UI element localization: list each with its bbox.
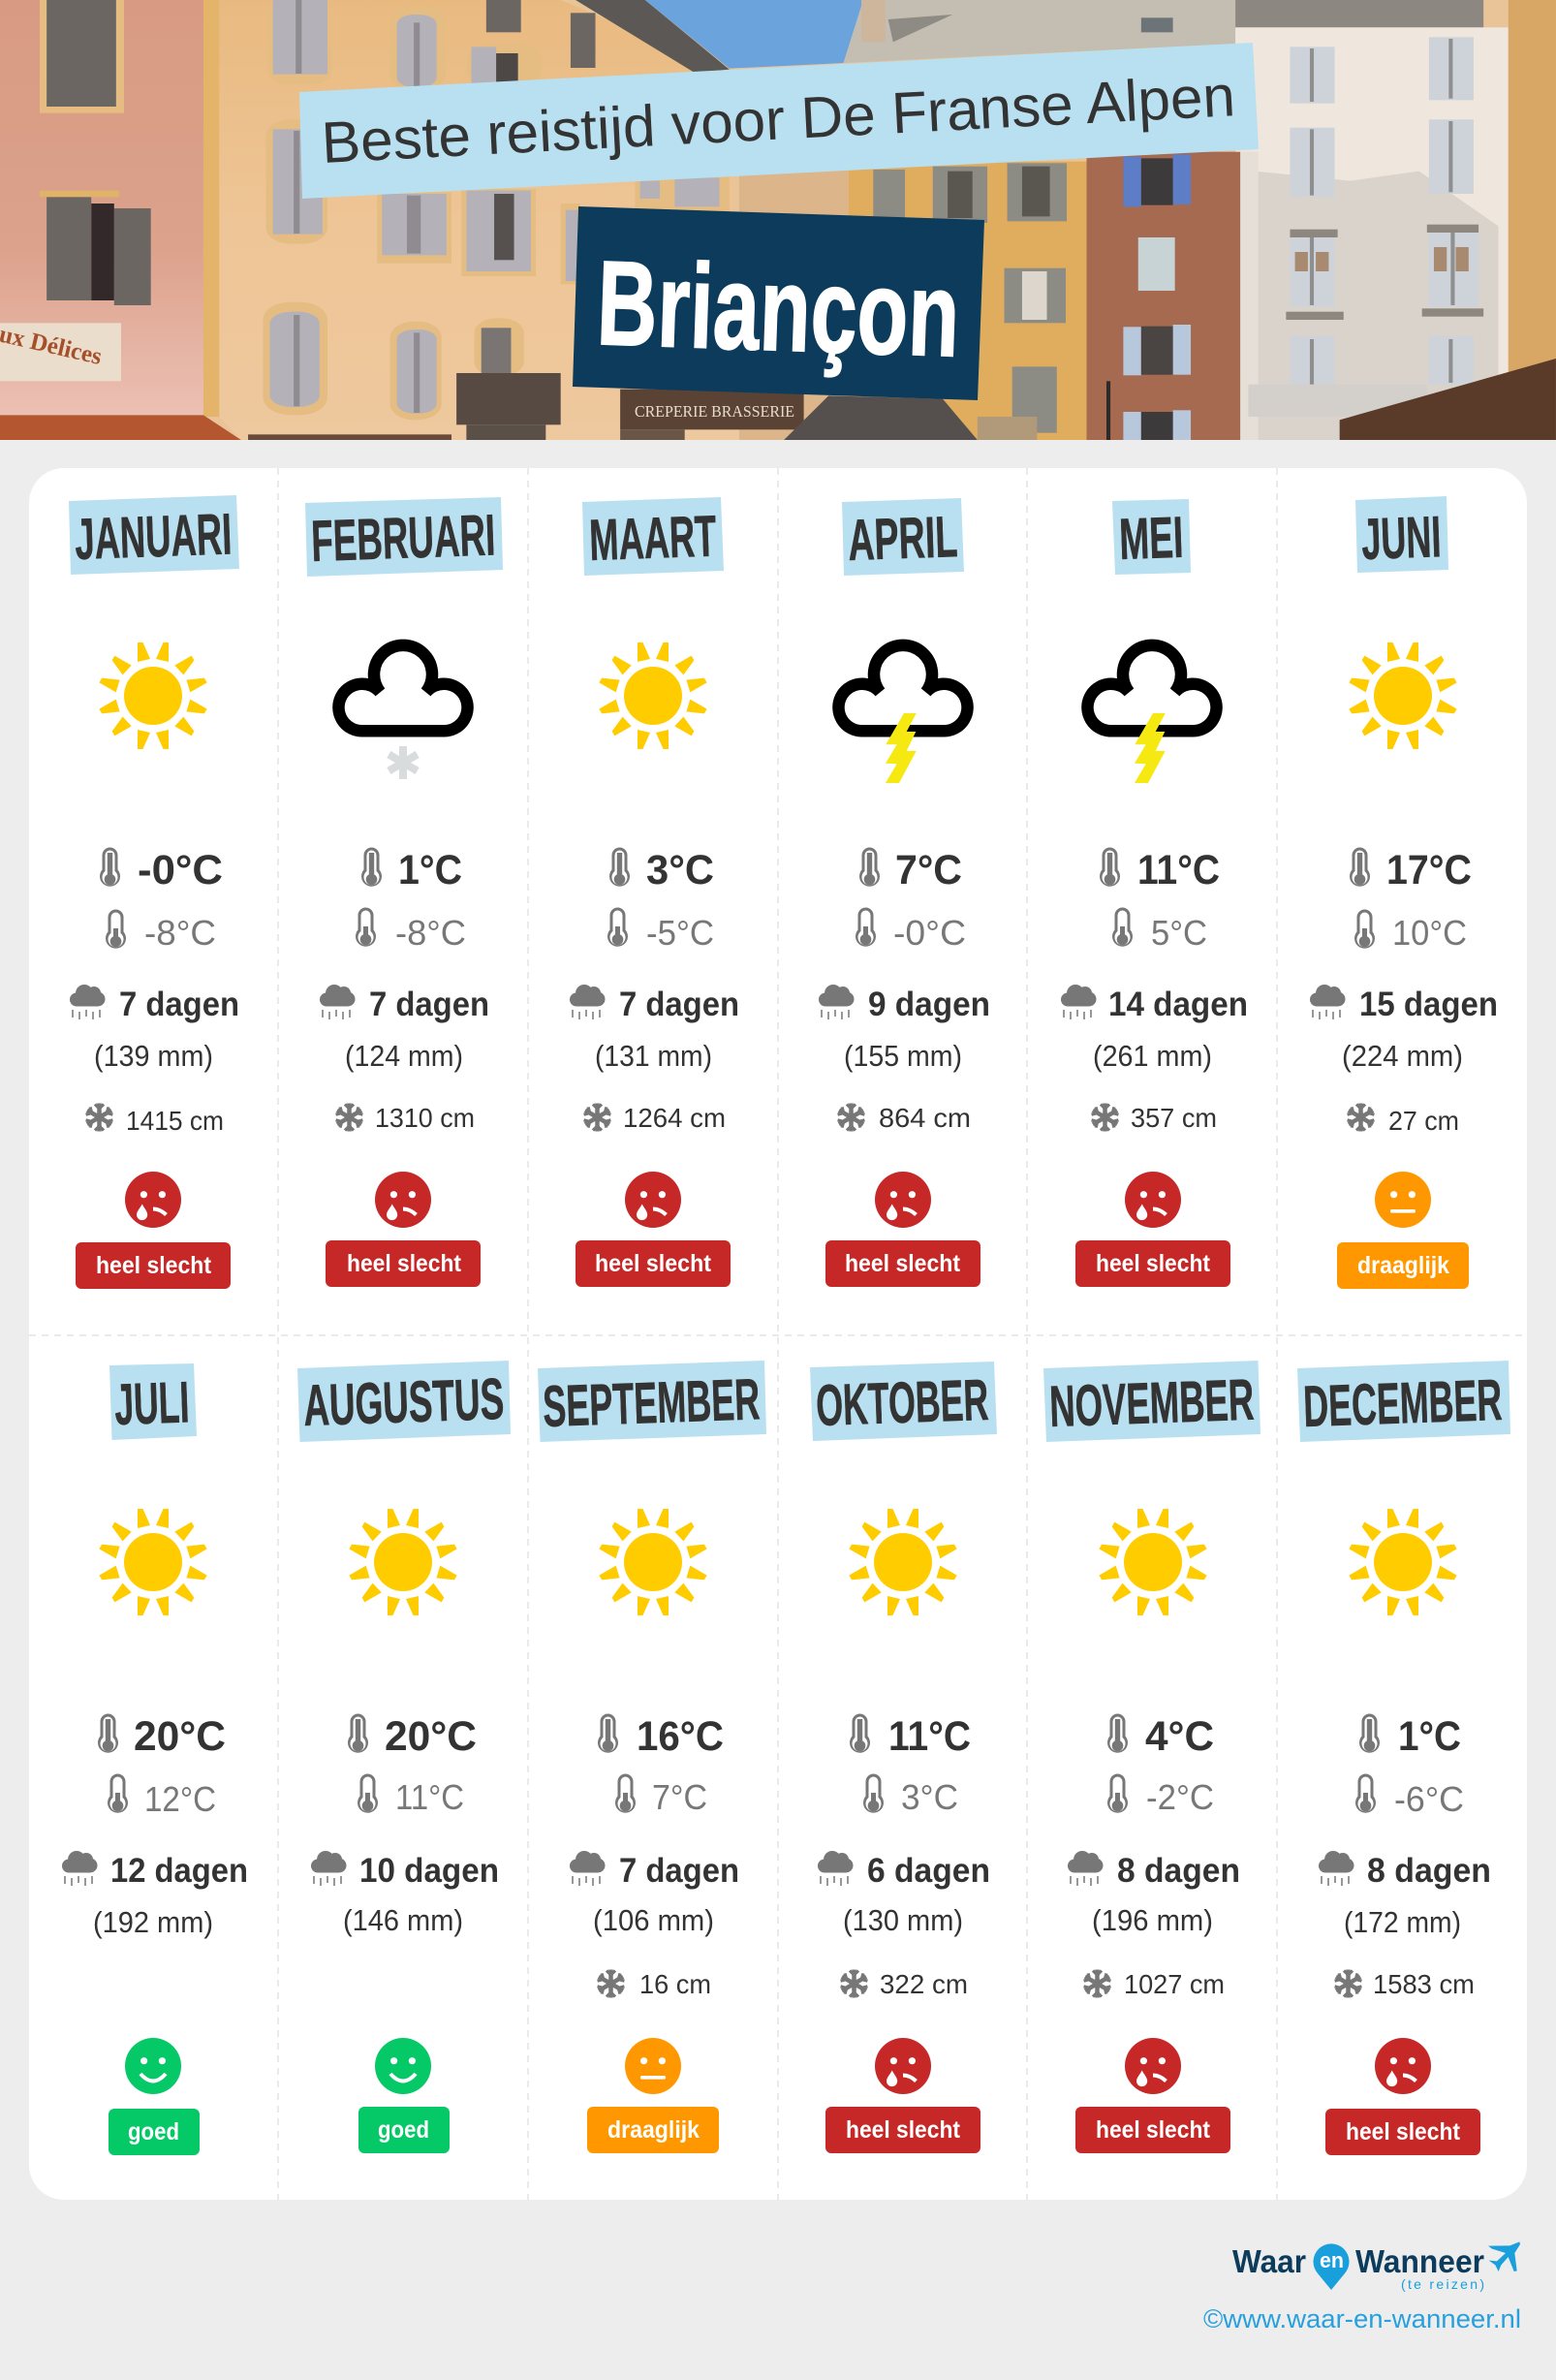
high temperature: -0°C [138,847,223,893]
rating label: heel slecht [1096,1250,1211,1277]
rain days: 7 dagen [369,986,489,1023]
precipitation: (130 mm) [843,1903,963,1937]
icon: sun [1349,1509,1457,1615]
high temperature: 7°C [895,847,962,893]
icon: sun [849,1509,957,1615]
snow [840,1969,968,1999]
month label: oktober: OKTOBER [815,1367,989,1438]
snow: 322 cm [880,1969,968,1999]
panel: augustus [297,1361,511,2153]
rating label [1325,2109,1480,2155]
low temperature: -5°C [646,913,714,953]
panel: januari [69,495,239,1289]
logo: Waar en Wanneer: Wanneer [1355,2243,1484,2279]
month label: februari [305,497,503,577]
rain days [62,1851,248,1890]
rain days: 10 dagen [359,1852,499,1890]
rain days: 12 dagen [110,1852,248,1890]
month label: maart [582,497,724,576]
panel: november [1043,1361,1260,2153]
rating label [76,1242,231,1289]
rating label: heel slecht [1096,2116,1211,2144]
logo: Waar en Wanneer: en [1320,2248,1344,2272]
month label: februari: FEBRUARI [310,502,496,574]
rain days: 15 dagen [1359,986,1498,1023]
low temperature: 12°C [144,1779,216,1819]
precipitation: (131 mm) [595,1039,712,1073]
precipitation: (192 mm) [93,1905,213,1939]
rating label: heel slecht [347,1250,462,1277]
rating label: heel slecht [96,1252,212,1279]
month label: juni: JUNI [1360,504,1442,572]
high temperature [361,847,462,893]
low temperature [863,1773,958,1817]
high temperature: 20°C [134,1713,226,1760]
rating label [109,2109,200,2155]
month label: oktober [810,1362,997,1441]
icon: sun [1349,642,1457,749]
icon: thunder cloud [1087,645,1217,783]
panel: mei [1061,499,1248,1287]
icon: sun [599,1509,707,1615]
low temperature: -2°C [1146,1777,1214,1817]
rating face [1125,1172,1181,1228]
month label: mei: MEI [1118,505,1184,572]
rating face [375,2038,431,2094]
high temperature: 20°C [385,1713,477,1760]
low temperature: -8°C [144,913,216,953]
panel: april [819,498,990,1287]
rain days: 7 dagen [119,986,239,1023]
snow [335,1103,475,1133]
high temperature [1100,847,1220,893]
rain days: 8 dagen [1367,1852,1491,1890]
month label: april: APRIL [847,504,958,573]
panel: oktober [810,1362,997,2153]
high temperature: 11°C [888,1713,971,1760]
snow [597,1969,711,1999]
rating label [1075,2107,1230,2153]
low temperature [1355,1773,1464,1819]
precipitation: (196 mm) [1092,1903,1213,1937]
rating face [875,1172,931,1228]
panel: maart [570,497,739,1287]
month label: juli: JULI [113,1369,190,1437]
rating label [587,2107,719,2153]
rain days: 14 dagen [1108,986,1248,1023]
month label: maart: MAART [588,503,717,573]
rating label: goed [378,2116,429,2144]
rating face [1375,2038,1431,2094]
icon: snow cloud [338,645,468,779]
high temperature [609,847,714,893]
icon: sun [349,1509,457,1615]
high temperature [598,1713,724,1760]
precipitation: (139 mm) [94,1039,213,1073]
icon: sun [599,642,707,749]
panel: februari [305,497,503,1287]
icon: sun [1099,1509,1207,1615]
high temperature: 11°C [1137,847,1220,893]
precipitation: (124 mm) [345,1039,463,1073]
high temperature [1359,1713,1461,1760]
snow: 1583 cm [1373,1969,1475,1999]
rain days [818,1851,990,1890]
rating label: heel slecht [845,1250,961,1277]
rating face [875,2038,931,2094]
title banner [299,43,1259,199]
logo: Waar en Wanneer: Waar [1232,2243,1306,2279]
month label: januari: JANUARI [74,501,233,572]
month label: juli [109,1363,197,1440]
rain days [1310,985,1498,1023]
low temperature: 3°C [901,1777,958,1817]
high temperature [100,847,223,893]
low temperature: 7°C [652,1777,707,1817]
rain days [1319,1851,1491,1890]
rating label [825,1240,980,1287]
rain days [311,1851,499,1890]
snow: 16 cm [639,1969,711,1999]
low temperature [607,907,714,953]
high temperature [850,1713,971,1760]
icon: map pin [1314,2243,1349,2290]
icon: plane [1488,2241,1520,2271]
high temperature [1107,1713,1214,1760]
rating label: heel slecht [846,2116,961,2144]
rating label [825,2107,980,2153]
header photo: street of Briançon [0,0,1556,440]
panel: september [538,1361,766,2153]
panel: december [1297,1361,1510,2155]
month label: april [842,498,964,576]
title text: Beste reistijd voor De Franse Alpen [320,63,1236,175]
rating face [1125,2038,1181,2094]
high temperature [1350,847,1472,893]
precipitation: (146 mm) [343,1903,463,1937]
low temperature [108,1773,216,1819]
rain days: 6 dagen [867,1852,990,1890]
snow [1347,1103,1459,1136]
logo: Waar en Wanneer [1232,2241,1520,2292]
precipitation: (224 mm) [1342,1039,1463,1073]
rain days: 8 dagen [1117,1852,1240,1890]
snow: 1264 cm [623,1103,726,1133]
website credit: ©www.waar-en-wanneer.nl [1203,2304,1521,2333]
precipitation: (261 mm) [1093,1039,1212,1073]
city banner [573,206,984,400]
month label: augustus [297,1361,511,1442]
rain days [570,985,739,1023]
rating label [1337,1242,1469,1289]
city name: Briançon [595,236,962,383]
low temperature [1107,1773,1214,1817]
header photo: street of Briançon: CREPERIE BRASSERIE [635,402,794,421]
snow [85,1103,224,1136]
rating label: draaglijk [607,2116,700,2144]
snow: 1310 cm [375,1103,475,1133]
snow [1083,1969,1225,1999]
high temperature: 17°C [1386,847,1472,893]
month label: september: SEPTEMBER [542,1366,761,1439]
rain days [320,985,489,1023]
rating face [625,2038,681,2094]
rating label [576,1240,731,1287]
rating label [358,2107,450,2153]
snow: 357 cm [1131,1103,1217,1133]
month label: juni [1355,496,1448,573]
month label: mei [1112,499,1191,575]
rain days [70,985,239,1023]
logo: Waar en Wanneer: (te reizen) [1401,2276,1484,2292]
snow: 864 cm [879,1103,971,1133]
snow: 1027 cm [1124,1969,1225,1999]
rating face [125,1172,181,1228]
high temperature: 1°C [398,847,462,893]
snow: 27 cm [1388,1106,1459,1136]
panel: month grid [29,468,1527,2200]
month label: november [1043,1361,1260,1442]
month label: november: NOVEMBER [1048,1367,1255,1439]
panel: juni [1310,496,1498,1289]
icon: thunder cloud [838,645,968,783]
low temperature: -6°C [1394,1779,1464,1819]
high temperature: 3°C [646,847,714,893]
precipitation: (155 mm) [844,1039,962,1073]
low temperature: 5°C [1151,913,1207,953]
snow [837,1103,971,1133]
high temperature [859,847,962,893]
low temperature: 11°C [395,1777,464,1817]
low temperature: -8°C [395,913,466,953]
icon: sun [99,642,207,749]
rain days: 9 dagen [868,986,990,1023]
low temperature [1354,909,1467,953]
precipitation: (106 mm) [593,1903,714,1937]
windows [40,0,730,420]
high temperature: 16°C [637,1713,724,1760]
snow: 1415 cm [126,1106,224,1136]
snow [1091,1103,1217,1133]
low temperature [856,907,966,953]
rain days [1068,1851,1240,1890]
panel: juli [62,1363,248,2155]
rain days: 7 dagen [619,986,739,1023]
rating face [125,2038,181,2094]
icon: sun [99,1509,207,1615]
low temperature [1112,907,1207,953]
rain days [570,1851,739,1890]
high temperature: 4°C [1145,1713,1214,1760]
rating label: heel slecht [1346,2118,1461,2145]
low temperature [358,1773,464,1817]
rating label [326,1240,481,1287]
rating face [1375,1172,1431,1228]
rating label [1075,1240,1230,1287]
month label: september [538,1361,766,1442]
rating label: draaglijk [1357,1252,1449,1279]
month label: augustus: AUGUSTUS [302,1366,505,1438]
high temperature: 1°C [1398,1713,1461,1760]
low temperature [106,909,216,953]
low temperature [615,1773,707,1817]
rain days: 7 dagen [619,1852,739,1890]
low temperature: 10°C [1392,913,1467,953]
rating label: goed [128,2118,179,2145]
rain days [819,985,990,1023]
low temperature: -0°C [893,913,966,953]
rating label: heel slecht [595,1250,712,1277]
rating face [375,1172,431,1228]
month label: januari [69,495,239,575]
rating face [625,1172,681,1228]
precipitation: (172 mm) [1344,1905,1461,1939]
low temperature [356,907,466,953]
